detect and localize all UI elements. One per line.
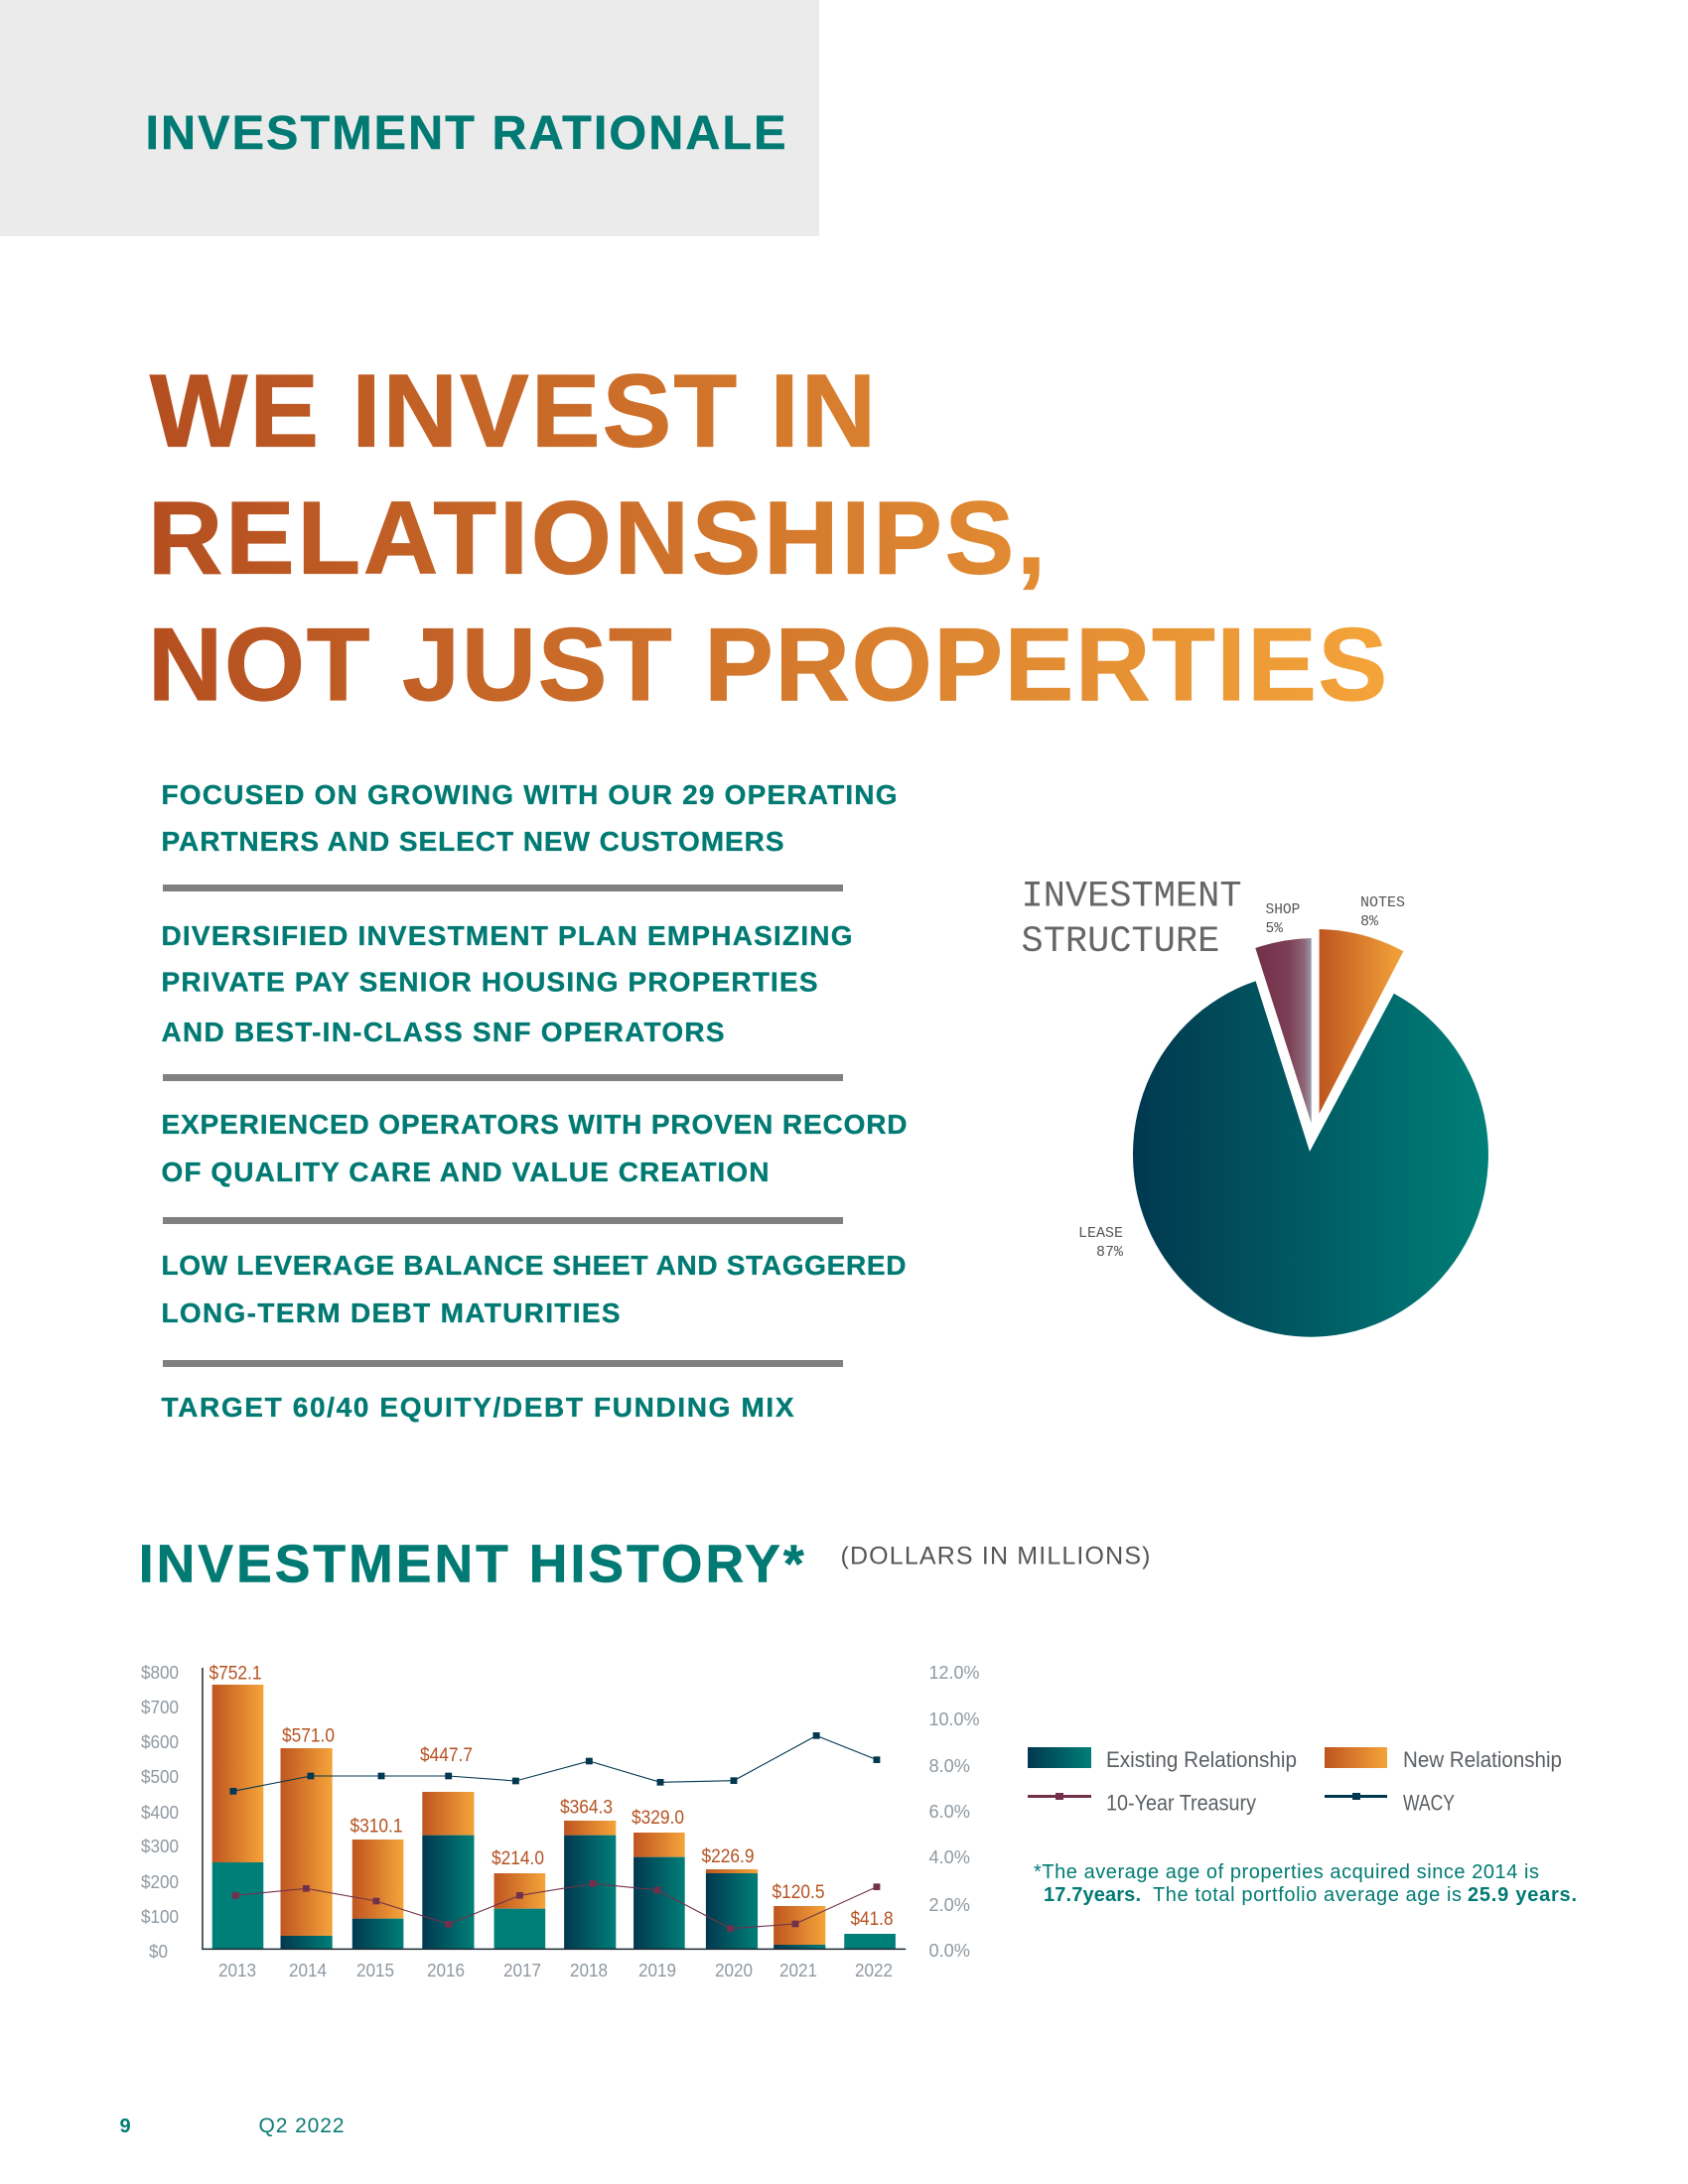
left axis labels: $300 [141, 1836, 179, 1856]
label: lease: 87% [1096, 1244, 1124, 1261]
right axis labels: 12.0% [929, 1662, 979, 1683]
right axis labels: 2.0% [929, 1894, 970, 1915]
bar value labels: $226.9 [701, 1846, 755, 1867]
header band [0, 0, 819, 236]
year labels [218, 1960, 893, 1980]
point: operating partners: FOCUSED ON GROWING WITH OUR 29 OPERATING [161, 779, 898, 810]
year labels: 2021 [779, 1960, 817, 1980]
point: experienced operators: OF QUALITY CARE AND VALUE CREATION [161, 1157, 769, 1187]
bar and line chart [141, 1662, 979, 1980]
bar value labels [209, 1664, 894, 1930]
point: experienced operators [161, 1109, 908, 1187]
label: shop [1265, 902, 1300, 937]
line: WACY [229, 1732, 880, 1795]
right axis labels: 6.0% [929, 1801, 970, 1822]
left axis labels: $700 [141, 1697, 179, 1717]
point: diversified plan: AND BEST-IN-CLASS SNF OPERATORS [161, 1017, 725, 1047]
legend: existing relationship: Existing Relationship [1106, 1747, 1297, 1772]
footnote: The total portfolio average age is [1153, 1884, 1462, 1906]
pie heading: STRUCTURE [1021, 921, 1219, 963]
main headline: RELATIONSHIPS, [148, 480, 1046, 596]
main headline: NOT JUST PROPERTIES [148, 608, 1387, 723]
left axis labels [141, 1662, 179, 1962]
pie slice: notes [1320, 929, 1403, 1114]
pie heading: INVESTMENT [1021, 876, 1242, 917]
year labels: 2013 [218, 1960, 256, 1980]
point: diversified plan: DIVERSIFIED INVESTMENT PLAN EMPHASIZING [161, 920, 852, 951]
point: experienced operators: EXPERIENCED OPERATORS WITH PROVEN RECORD [161, 1109, 908, 1140]
units note: (DOLLARS IN MILLIONS) [840, 1543, 1150, 1570]
label: shop: 5% [1265, 921, 1283, 937]
footer date: Q2 2022 [258, 2115, 344, 2137]
bar value labels: $329.0 [632, 1808, 684, 1829]
legend: existing relationship [1028, 1747, 1297, 1772]
label: lease [1078, 1225, 1124, 1261]
year labels: 2020 [715, 1960, 753, 1980]
bar value labels: $571.0 [282, 1725, 335, 1747]
left axis labels: $100 [141, 1906, 179, 1927]
legend: 10-year treasury [1028, 1791, 1257, 1815]
right axis labels: 10.0% [929, 1708, 979, 1729]
year labels: 2015 [356, 1960, 394, 1980]
main headline [148, 353, 1387, 723]
left axis labels: $0 [149, 1941, 168, 1962]
year labels: 2019 [638, 1960, 676, 1980]
year labels: 2014 [289, 1960, 327, 1980]
point: funding mix: TARGET 60/40 EQUITY/DEBT FUNDING MIX [161, 1392, 794, 1423]
left axis labels: $600 [141, 1731, 179, 1752]
year labels: 2018 [570, 1960, 608, 1980]
right axis labels [929, 1662, 979, 1961]
point: operating partners [161, 779, 898, 857]
investment history heading: INVESTMENT HISTORY* [139, 1535, 804, 1594]
footnote: 25.9 years. [1468, 1884, 1577, 1906]
footer page number: 9 [119, 2116, 131, 2137]
bar value labels: $447.7 [420, 1745, 473, 1766]
year labels: 2016 [427, 1960, 465, 1980]
bar value labels: $364.3 [560, 1797, 613, 1819]
left axis labels: $400 [141, 1802, 179, 1823]
legend [1028, 1747, 1562, 1815]
bar value labels: $120.5 [773, 1882, 824, 1903]
pie slice: shop [1255, 938, 1312, 1124]
bar value labels: $41.8 [850, 1909, 894, 1930]
right axis labels: 4.0% [929, 1846, 970, 1867]
legend: new relationship [1325, 1747, 1562, 1772]
legend: new relationship: New Relationship [1403, 1747, 1562, 1772]
label: lease: LEASE [1078, 1225, 1123, 1242]
label: notes [1360, 894, 1405, 930]
label: notes: 8% [1360, 913, 1379, 930]
bars: existing and new relationship [212, 1685, 896, 1949]
line: 10-year treasury [232, 1880, 880, 1932]
label: shop: SHOP [1265, 902, 1300, 918]
panel: investment structure pie chart [1021, 876, 1488, 1337]
point: low leverage: LONG-TERM DEBT MATURITIES [161, 1297, 620, 1328]
bar value labels: $214.0 [492, 1848, 544, 1869]
left axis labels: $800 [141, 1662, 179, 1683]
footnote: *The average age of properties acquired since 2014 is [1034, 1861, 1539, 1883]
left axis labels: $200 [141, 1871, 179, 1892]
section title: INVESTMENT RATIONALE [145, 106, 786, 160]
point: low leverage: LOW LEVERAGE BALANCE SHEET AND STAGGERED [161, 1250, 906, 1281]
left axis labels: $500 [141, 1766, 179, 1787]
year labels: 2017 [503, 1960, 541, 1980]
pie heading [1021, 876, 1242, 963]
year labels: 2022 [855, 1960, 893, 1980]
right axis labels: 0.0% [929, 1940, 970, 1961]
footnote [1034, 1861, 1577, 1906]
legend: WACY [1325, 1791, 1455, 1815]
axes [203, 1668, 906, 1949]
point: diversified plan [161, 920, 852, 1047]
legend: 10-year treasury: 10-Year Treasury [1106, 1791, 1257, 1815]
point: diversified plan: PRIVATE PAY SENIOR HOUSING PROPERTIES [161, 967, 818, 997]
main headline: WE INVEST IN [150, 353, 876, 469]
bullet list: investment points [161, 779, 908, 1423]
bar value labels: $310.1 [350, 1817, 403, 1837]
legend: WACY: WACY [1403, 1791, 1455, 1815]
bar value labels: $752.1 [209, 1664, 262, 1684]
label: notes: NOTES [1360, 894, 1405, 911]
pie slice: lease [1133, 981, 1488, 1337]
right axis labels: 8.0% [929, 1755, 970, 1776]
point: operating partners: PARTNERS AND SELECT NEW CUSTOMERS [161, 826, 784, 857]
point: low leverage [161, 1250, 906, 1328]
footnote: 17.7years. [1044, 1884, 1141, 1906]
